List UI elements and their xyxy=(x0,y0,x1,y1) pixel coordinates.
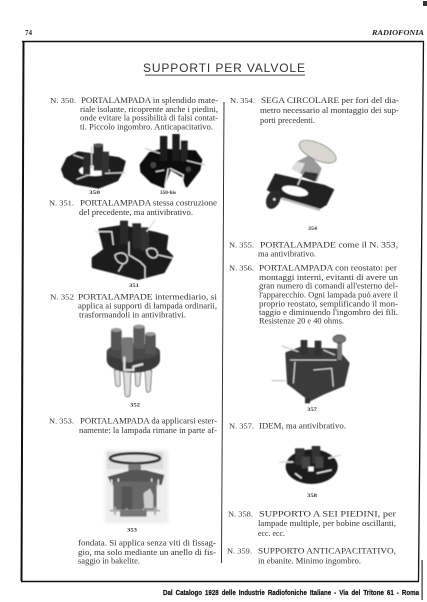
running header: RADIOFONIA xyxy=(371,28,424,37)
item 353 text: PORTALAMPADA da applicarsi ester- xyxy=(80,416,217,426)
item 350 text xyxy=(50,96,218,132)
item 353 text xyxy=(49,416,217,435)
caption 357: 357 xyxy=(307,407,317,413)
column divider xyxy=(222,102,224,563)
icon: socket 350 xyxy=(62,143,125,187)
icon: socket 352 xyxy=(107,325,160,397)
icon: socket with rheostat 357 xyxy=(272,335,348,403)
caption 354: 354 xyxy=(308,226,317,232)
item 355 text xyxy=(229,240,398,258)
item 358 text xyxy=(228,510,396,538)
item 356 text: gran numero di comandi all'esterno del- xyxy=(259,282,398,290)
item 356 text: Resistenze 20 e 40 ohms. xyxy=(259,316,344,326)
icon: circular saw 354 xyxy=(263,136,339,211)
item 352 text xyxy=(50,292,218,320)
item 354 text xyxy=(230,96,399,125)
title: SUPPORTI PER VALVOLE xyxy=(143,61,305,75)
item 357 text: IDEM, ma antivibrativo. xyxy=(259,422,346,430)
item 355 text: N. 355. xyxy=(229,240,254,250)
page edge marks xyxy=(422,1,427,600)
item 358 text: N. 358. xyxy=(228,510,253,518)
item 353 continued text: saggio in bakelite. xyxy=(78,556,140,566)
item 351 text: del precedente, ma antivibrativo. xyxy=(79,208,193,217)
icon: socket 353 xyxy=(105,450,168,523)
item 353 continued text: gio, ma solo mediante un anello di fis- xyxy=(78,548,216,557)
caption 352: 352 xyxy=(130,402,140,408)
item 350 text: ti. Piccolo ingombro. Anticapacitativo. xyxy=(80,122,213,132)
item 352 text: N. 352 xyxy=(50,292,74,302)
item 359 text: N. 359. xyxy=(227,546,252,556)
item 354 text: SEGA CIRCOLARE per fori del dia- xyxy=(261,96,399,105)
item 352 text: PORTALAMPADE intermediario, si xyxy=(78,292,218,302)
item 356 text: proprio reostato, semplificando il mon- xyxy=(259,300,398,308)
caption 350: 350 xyxy=(89,190,100,196)
item 359 text xyxy=(227,546,396,566)
item 355 text: ma antivibrativo. xyxy=(258,250,316,258)
item 350 text: PORTALAMPADA in splendido mate- xyxy=(81,96,218,105)
item 356 text: taggio e diminuendo l'ingombro dei fili. xyxy=(259,308,398,317)
item 358 text: lampade multiple, per bobine oscillanti, xyxy=(258,519,396,528)
item 351 text: N. 351. xyxy=(49,198,74,208)
page number: 74 xyxy=(25,28,32,37)
item 357 text xyxy=(229,422,346,430)
icon: socket 350-bis xyxy=(141,134,205,187)
caption 350-bis: 350-bis xyxy=(160,190,176,196)
item 353 text: N. 353. xyxy=(49,416,74,426)
item 350 text: riale isolante, ricoprente anche i piedini, xyxy=(80,105,218,114)
item 356 text: N. 356. xyxy=(229,264,254,272)
item 354 text: N. 354. xyxy=(230,96,255,105)
item 354 text: porti precedenti. xyxy=(260,116,315,125)
item 353 continued text: fondata. Si applica senza viti di fissag- xyxy=(78,538,216,548)
item 352 text: applica ai supporti di lampada ordinarii, xyxy=(78,302,217,310)
icon: socket 358 xyxy=(279,446,341,484)
item 357 text: N. 357. xyxy=(229,422,254,430)
caption 358: 358 xyxy=(307,493,317,499)
item 351 text: PORTALAMPADA stessa costruzione xyxy=(80,198,217,208)
item 353 continued text xyxy=(78,538,216,566)
item 353 text: namente: la lampada rimane in parte af- xyxy=(79,426,217,435)
item 358 text: SUPPORTO A SEI PIEDINI, per xyxy=(259,510,396,518)
item 359 text: in ebanite. Minimo ingombro. xyxy=(258,556,361,566)
item 358 text: ecc. ecc. xyxy=(258,529,285,538)
item 356 text xyxy=(229,264,399,326)
item 356 text: l'apparecchio. Ogni lampada può avere il xyxy=(259,290,399,300)
item 351 text xyxy=(49,198,217,217)
icon: socket 351 xyxy=(93,220,173,278)
item 356 text: montaggi interni, evitanti di avere un xyxy=(259,273,398,282)
item 352 text: trasformandoli in antivibrativi. xyxy=(79,310,186,320)
item 350 text: onde evitare la possibilità di falsi contat- xyxy=(80,114,218,122)
item 355 text: PORTALAMPADE come il N. 353, xyxy=(260,240,398,250)
item 356 text: PORTALAMPADA con reostato: per xyxy=(259,264,397,272)
item 354 text: metro necessario al montaggio dei sup- xyxy=(260,106,399,115)
caption 351: 351 xyxy=(129,283,139,289)
caption 353: 353 xyxy=(127,528,137,534)
item 359 text: SUPPORTO ANTICAPACITATIVO, xyxy=(258,546,396,556)
item 350 text: N. 350. xyxy=(50,96,76,105)
